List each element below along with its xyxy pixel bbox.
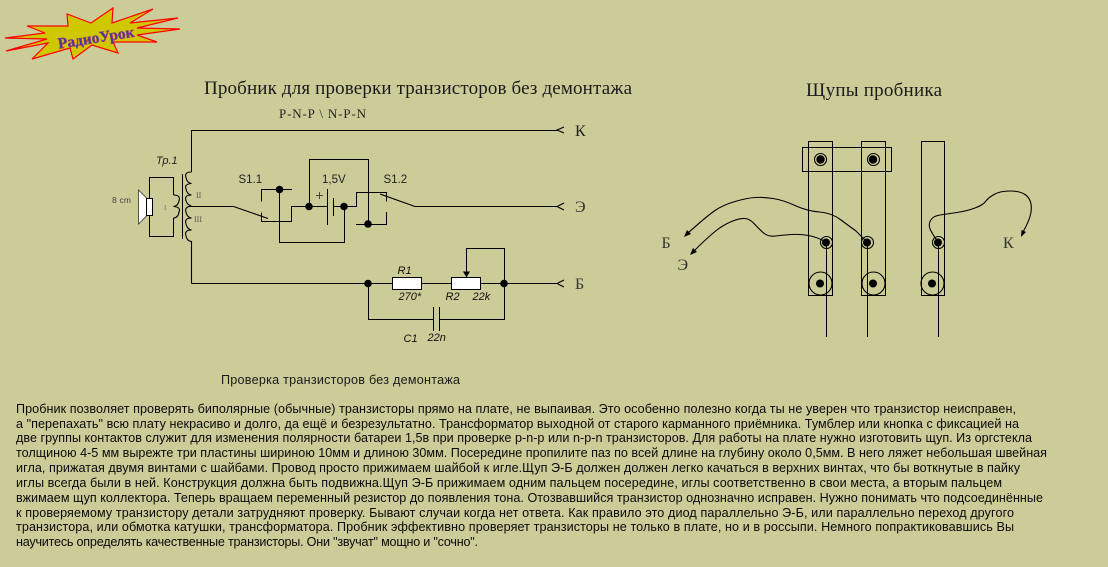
- logo text highlight: РадиоУрок: [57, 24, 135, 52]
- top screws: [814, 154, 880, 166]
- needle screws: [820, 236, 944, 248]
- component labels: 270*: [398, 291, 422, 303]
- caption: Проверка транзисторов без демонтажа: [221, 373, 460, 387]
- component labels: C1: [404, 333, 418, 345]
- title: probes: Щупы пробника: [806, 80, 943, 101]
- collector wire: [192, 130, 558, 172]
- plate 2: [862, 142, 886, 296]
- description text block: а "перепахать" всю плату некрасиво и долго, да ещё и безрезультатно. Трансформатор выходной от старого карманного приёмника. Тумблер или кнопка с фиксацией на: [16, 417, 1019, 431]
- base wire: [192, 282, 558, 284]
- emitter terminal: [557, 203, 564, 210]
- probe label E: Э: [678, 257, 688, 274]
- probe label K: К: [1003, 235, 1014, 252]
- description text block: Пробник позволяет проверять биполярные (обычные) транзисторы прямо на плате, не выпаивая. Это особенно полезно когда ты не уверен что транзистор неисправен,: [16, 402, 1016, 416]
- switch S1.1 label: S1.1: [238, 174, 262, 186]
- title: circuit diagram: Пробник для проверки транзисторов без демонтажа: [204, 78, 633, 99]
- bottom screws: [809, 272, 944, 295]
- circuit schematic: [112, 123, 586, 345]
- battery plus sign: [316, 192, 323, 199]
- plate 3: [922, 142, 944, 296]
- winding labels: III: [194, 215, 202, 224]
- description text block: транзистора, или обмотка катушки, трансформатора. Пробник эффективно проверяет транзисторы не только в плате, но и в россыпи. Немного попрактиковавшись Вы: [16, 520, 1014, 534]
- winding labels: I: [164, 204, 167, 212]
- description text block: две группы контактов служит для изменения полярности батареи 1,5в при проверке p-n-p или n-p-n транзисторов. Для работы на плате нужно изготовить щуп. Из оргстекла: [16, 431, 1032, 445]
- wire to E: [690, 218, 826, 255]
- winding labels: [164, 191, 202, 224]
- junction dots: [364, 280, 508, 287]
- component labels: R2: [446, 291, 460, 303]
- description text block: научитесь определять качественные транзисторы. Они "звучат" мощно и "сочно".: [16, 535, 478, 549]
- logo text: РадиоУрок: [57, 24, 136, 53]
- logo: starburst badge: [5, 8, 180, 59]
- speaker connection: [150, 178, 174, 236]
- component labels: R1: [398, 265, 412, 277]
- base terminal: [557, 280, 564, 287]
- transformer primary winding: [174, 195, 179, 218]
- resistor R1: [392, 278, 422, 290]
- description text block: к проверяемому транзистору детали затрудняют проверку. Бывают случаи когда нет ответа. Как правило это диод параллельно Э-Б, или параллельно переход другого: [16, 506, 1014, 520]
- plate 1: [808, 142, 832, 296]
- battery label: 1,5V: [322, 174, 346, 186]
- component labels: 22k: [472, 291, 491, 303]
- resistor R2: [452, 248, 504, 290]
- switch S1.1: [188, 186, 344, 242]
- speaker icon: [138, 190, 152, 224]
- battery: [305, 160, 386, 225]
- switch S1.2 label: S1.2: [384, 174, 407, 186]
- collector terminal: [557, 127, 564, 133]
- transformer label: Тр.1: [156, 155, 178, 167]
- description text block: [16, 402, 1047, 549]
- transformer secondary winding: [186, 172, 192, 284]
- probe label B: Б: [662, 235, 671, 252]
- wire to K: [929, 191, 1031, 242]
- label: K: К: [575, 123, 586, 140]
- description text block: толщиною 4-5 мм вырежте три пластины шириною 10мм и длиною 30мм. Посередине пропилите паз по всей длине на глубину около 0,5мм. В него ляжет небольшая швейная: [16, 446, 1047, 460]
- label: E: Э: [575, 199, 586, 216]
- label: B: Б: [575, 276, 584, 293]
- probes drawing: [662, 142, 1031, 337]
- description text block: вжимаем щуп коллектора. Теперь вращаем переменный резистор до появления тона. Отозвавшийся транзистор однозначно исправен. Нужно понимать что подсоединённые: [16, 491, 1043, 505]
- switch S1.2: [356, 194, 415, 228]
- component labels: [398, 265, 491, 345]
- winding labels: II: [196, 191, 202, 200]
- description text block: игла, прижатая двумя винтами с шайбами. Провод просто прижимаем шайбой к игле.Щуп Э-Б должен должен легко качаться в верхних винтах, что бы воткнутые в пайку: [16, 461, 1021, 475]
- capacitor C1 and bypass loop: [368, 284, 504, 331]
- description text block: иглы всегда были в ней. Конструкция должна быть подвижна.Щуп Э-Б прижимаем одним пальцем посередине, иглы соответственно в свои места, а вторым пальцем: [16, 476, 1002, 490]
- crossbar: [802, 148, 892, 172]
- wire to B: [684, 197, 867, 242]
- speaker label: 8 cm: [112, 195, 131, 205]
- needles: [826, 242, 938, 337]
- transformer core: [182, 174, 184, 239]
- label: polarity: P-N-P \ N-P-N: [279, 106, 367, 121]
- emitter wire: [415, 206, 558, 208]
- component labels: 22n: [426, 332, 446, 344]
